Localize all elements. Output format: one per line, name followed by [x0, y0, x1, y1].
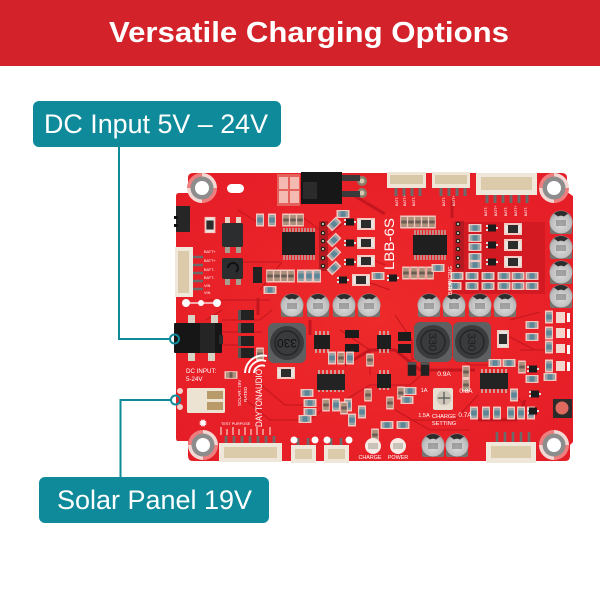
- white pin labels top: BATT+: [403, 196, 407, 206]
- small power inductors: [205, 217, 262, 285]
- white pin labels top: BATT+: [494, 206, 498, 216]
- left side pin header and vertical connector: [174, 206, 221, 307]
- left side pin header and vertical connector: BATT-: [204, 268, 215, 272]
- left side pin header and vertical connector: BATT+: [204, 259, 216, 263]
- white top connectors: [387, 172, 537, 203]
- left side pin header and vertical connector: VIN: [204, 284, 211, 288]
- centre passive components: [298, 321, 556, 442]
- DC input silkscreen label: 5-24V: [186, 376, 203, 383]
- resistor clusters: [256, 210, 538, 294]
- mounting holes: [187, 173, 569, 460]
- connector line: solar panel: [120, 400, 171, 477]
- solar connector: [177, 379, 248, 413]
- solar connector: SOLAR: 19V: [237, 379, 242, 406]
- white pin labels top: [395, 196, 528, 216]
- charge inductors: [414, 322, 491, 362]
- left side pin header and vertical connector: BATT+: [204, 250, 216, 254]
- white pin labels top: BATT-: [484, 207, 488, 216]
- marker: solar port: [171, 396, 180, 404]
- Dayton Audio logo: DAYTONAUDIO: [254, 369, 265, 427]
- charge current selector: 1A: [421, 388, 428, 394]
- reset push button: [553, 399, 572, 418]
- solar connector: RATED: [243, 386, 248, 402]
- charge current selector: 0.8A: [459, 388, 473, 395]
- electrolytic capacitors: [280, 210, 572, 457]
- charge current selector: [418, 371, 473, 427]
- inductor 330: [268, 323, 306, 363]
- status LEDs right edge: [545, 310, 570, 372]
- header banner: [0, 0, 600, 66]
- white pin labels top: BATT-: [524, 207, 528, 216]
- left IC: [282, 228, 315, 260]
- white pin labels top: BATT-: [442, 197, 446, 206]
- transistors and big resistors: [337, 218, 522, 286]
- DC input jack: [174, 315, 223, 361]
- right IC: [413, 230, 447, 260]
- white pin labels top: BATT+: [514, 206, 518, 216]
- panel: circuit board: [174, 172, 573, 463]
- charge current selector: CHARGE: [432, 414, 456, 420]
- label: solar panel: Solar Panel 19V: [57, 485, 252, 515]
- bottom connectors: [198, 418, 536, 463]
- centre SMT ICs: [314, 330, 509, 393]
- bottom connectors: TEST PURPOSE: [221, 422, 251, 426]
- charge current selector: 1.5A: [418, 413, 430, 419]
- connector line: DC input: [119, 147, 170, 339]
- diodes near jack: [224, 310, 295, 379]
- board model label: LBB-6S: [381, 218, 397, 270]
- left side pin header and vertical connector: VIN: [204, 291, 211, 295]
- label: solar panel: [39, 477, 269, 523]
- DC input silkscreen label: [186, 368, 217, 383]
- board outline: [176, 173, 573, 461]
- charge and power LEDs: [358, 438, 408, 461]
- charge current selector: 0.7A: [458, 412, 472, 419]
- charge and power LEDs: CHARGE: [358, 455, 382, 461]
- white pin labels top: BATT-: [504, 207, 508, 216]
- charge current selector: 0.9A: [437, 371, 451, 378]
- left side pin header and vertical connector: BATT-: [204, 276, 215, 280]
- label: DC input: [33, 101, 281, 147]
- white pin labels top: BATT+: [452, 196, 456, 206]
- white pin labels top: BATT-: [395, 197, 399, 206]
- charge and power LEDs: POWER: [388, 455, 408, 461]
- label: DC input: DC Input 5V – 24V: [44, 109, 268, 139]
- copper traces: [206, 210, 555, 430]
- charge inductors: 330: [465, 333, 477, 351]
- charge current selector: SETTING: [432, 421, 456, 427]
- Dayton Audio logo: [245, 356, 267, 427]
- pad headers: [319, 221, 464, 271]
- top black DC connector: [277, 172, 367, 206]
- bottom connectors: ✹: [198, 418, 208, 430]
- title: Versatile Charging Options: [109, 17, 509, 49]
- slot cutout: [227, 184, 244, 193]
- marker: DC input port: [170, 334, 179, 344]
- charge inductors: 330: [426, 333, 438, 351]
- balancing area: [453, 222, 545, 294]
- white pin labels top: BATT-: [412, 197, 416, 206]
- balancing label: BALANCING: [448, 266, 454, 295]
- inductor 330: 330: [277, 336, 297, 350]
- DC input silkscreen label: DC INPUT:: [186, 368, 217, 375]
